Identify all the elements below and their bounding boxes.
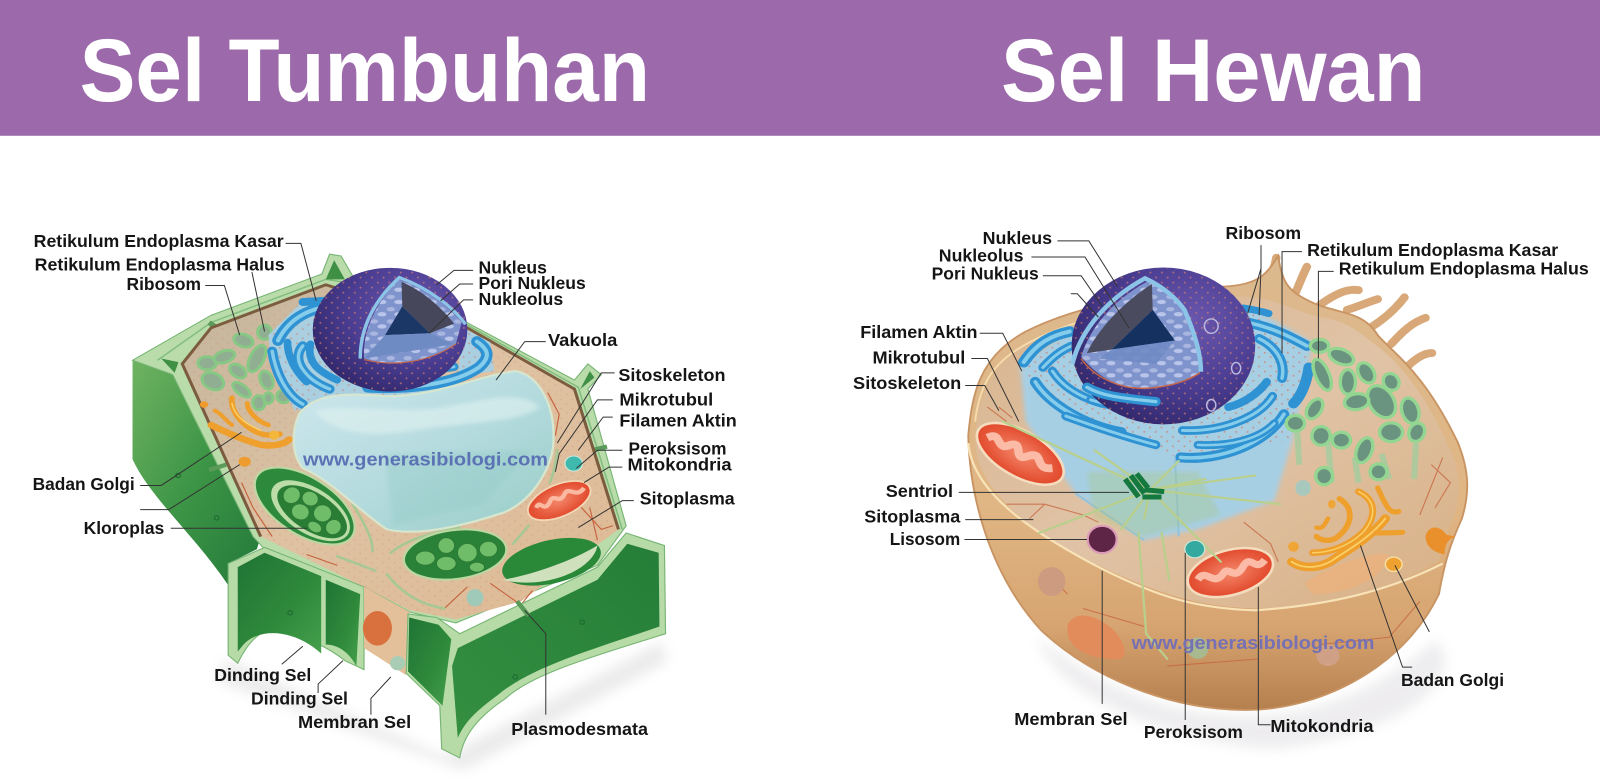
leader lines: animal cell	[959, 241, 1429, 725]
plant cell wall: left panel	[133, 360, 261, 585]
labels: animal cell: Badan Golgi	[1401, 670, 1504, 690]
organelle: chloroplast 3	[497, 529, 606, 594]
labels: plant cell: Plasmodesmata	[511, 719, 648, 739]
labels: plant cell: Membran Sel	[298, 712, 411, 732]
organelle: smooth ER	[1286, 339, 1427, 485]
labels: plant cell: Nukleolus	[479, 289, 563, 309]
organelle: chloroplast 2	[400, 524, 510, 586]
labels: plant cell: Sitoskeleton	[618, 365, 726, 385]
labels: animal cell: Mitokondria	[1270, 716, 1374, 736]
wall pits	[176, 473, 584, 679]
labels: plant cell: Retikulum Endoplasma Kasar	[34, 231, 284, 251]
organelle: golgi body	[200, 398, 289, 467]
labels: plant cell: Badan Golgi	[33, 474, 135, 494]
organelle: rough ER plant	[268, 297, 494, 411]
labels: plant cell: Mitokondria	[628, 455, 732, 475]
plant cell wall: back rim	[133, 254, 626, 623]
labels: animal cell: Mikrotubul	[872, 347, 965, 367]
front wall: right panel	[406, 533, 666, 758]
organelle: rough ER volume	[1020, 308, 1313, 540]
labels: plant cell	[33, 231, 737, 739]
labels: animal cell: Peroksisom	[1144, 722, 1243, 742]
labels: plant cell: Vakuola	[548, 330, 618, 350]
organelle: nucleus	[313, 268, 467, 392]
labels: plant cell: Dinding Sel	[251, 688, 348, 708]
organelle: mitochondrion	[522, 473, 597, 528]
front wall: left panel	[228, 547, 364, 670]
organelle: mitochondrion 2	[1181, 539, 1279, 606]
title: Sel Tumbuhan: Sel Tumbuhan	[80, 21, 650, 120]
labels: plant cell: Dinding Sel	[214, 665, 311, 685]
labels: animal cell: Nukleolus	[939, 245, 1023, 265]
plant cell illustration	[133, 243, 666, 770]
watermark: animal cell: www.generasibiologi.com	[1131, 632, 1374, 653]
organelle: vacuole	[294, 371, 554, 532]
labels: animal cell: Nukleus	[983, 228, 1052, 248]
organelle: chloroplast 1	[241, 452, 369, 560]
title: Sel Hewan: Sel Hewan	[1001, 21, 1426, 120]
labels: animal cell: Sitoskeleton	[853, 373, 961, 393]
organelle: vesicle	[467, 589, 483, 606]
animal cell body	[968, 256, 1467, 710]
labels: animal cell: Retikulum Endoplasma Kasar	[1307, 240, 1558, 260]
labels: plant cell: Peroksisom	[629, 438, 727, 458]
organelle: centrioles with rays	[1003, 421, 1280, 659]
filaments	[987, 407, 1450, 666]
organelle: mitochondrion 1	[966, 411, 1074, 497]
organelle: smooth ER	[198, 325, 291, 410]
organelle: nucleus	[1072, 267, 1255, 424]
organelle: golgi body	[1288, 488, 1455, 571]
labels: plant cell: Mikrotubul	[619, 389, 713, 409]
cell upper surface	[975, 296, 1459, 609]
labels: animal cell: Lisosom	[890, 529, 960, 549]
organelle: peroxisome	[565, 456, 583, 471]
organelle: lysosome	[1088, 526, 1117, 553]
labels: plant cell: Ribosom	[127, 274, 201, 294]
labels: plant cell: Retikulum Endoplasma Halus	[35, 255, 285, 275]
leader lines: plant cell	[140, 243, 634, 715]
labels: animal cell: Retikulum Endoplasma Halus	[1339, 259, 1589, 279]
labels: animal cell: Membran Sel	[1014, 709, 1128, 729]
labels: plant cell: Kloroplas	[84, 518, 164, 538]
animal cell illustration	[959, 241, 1467, 749]
labels: plant cell: Nukleus	[479, 258, 547, 278]
header band	[0, 0, 1600, 136]
filaments	[242, 393, 613, 609]
labels: animal cell: Pori Nukleus	[932, 264, 1039, 284]
lower cell strip	[363, 587, 410, 675]
watermark: plant cell: www.generasibiologi.com	[302, 448, 548, 470]
labels: animal cell: Ribosom	[1226, 223, 1301, 243]
labels: animal cell: Sitoplasma	[864, 507, 961, 527]
microvilli	[1259, 258, 1432, 366]
labels: plant cell: Pori Nukleus	[479, 273, 586, 293]
labels: animal cell: Filamen Aktin	[860, 322, 978, 342]
lower cell blobs	[1038, 480, 1389, 666]
organelle: peroxisome	[1185, 541, 1205, 558]
labels: animal cell	[853, 223, 1589, 742]
labels: plant cell: Sitoplasma	[640, 488, 735, 508]
labels: plant cell: Filamen Aktin	[619, 411, 737, 431]
cytoplasm floor	[182, 285, 618, 619]
labels: animal cell: Sentriol	[886, 481, 953, 501]
